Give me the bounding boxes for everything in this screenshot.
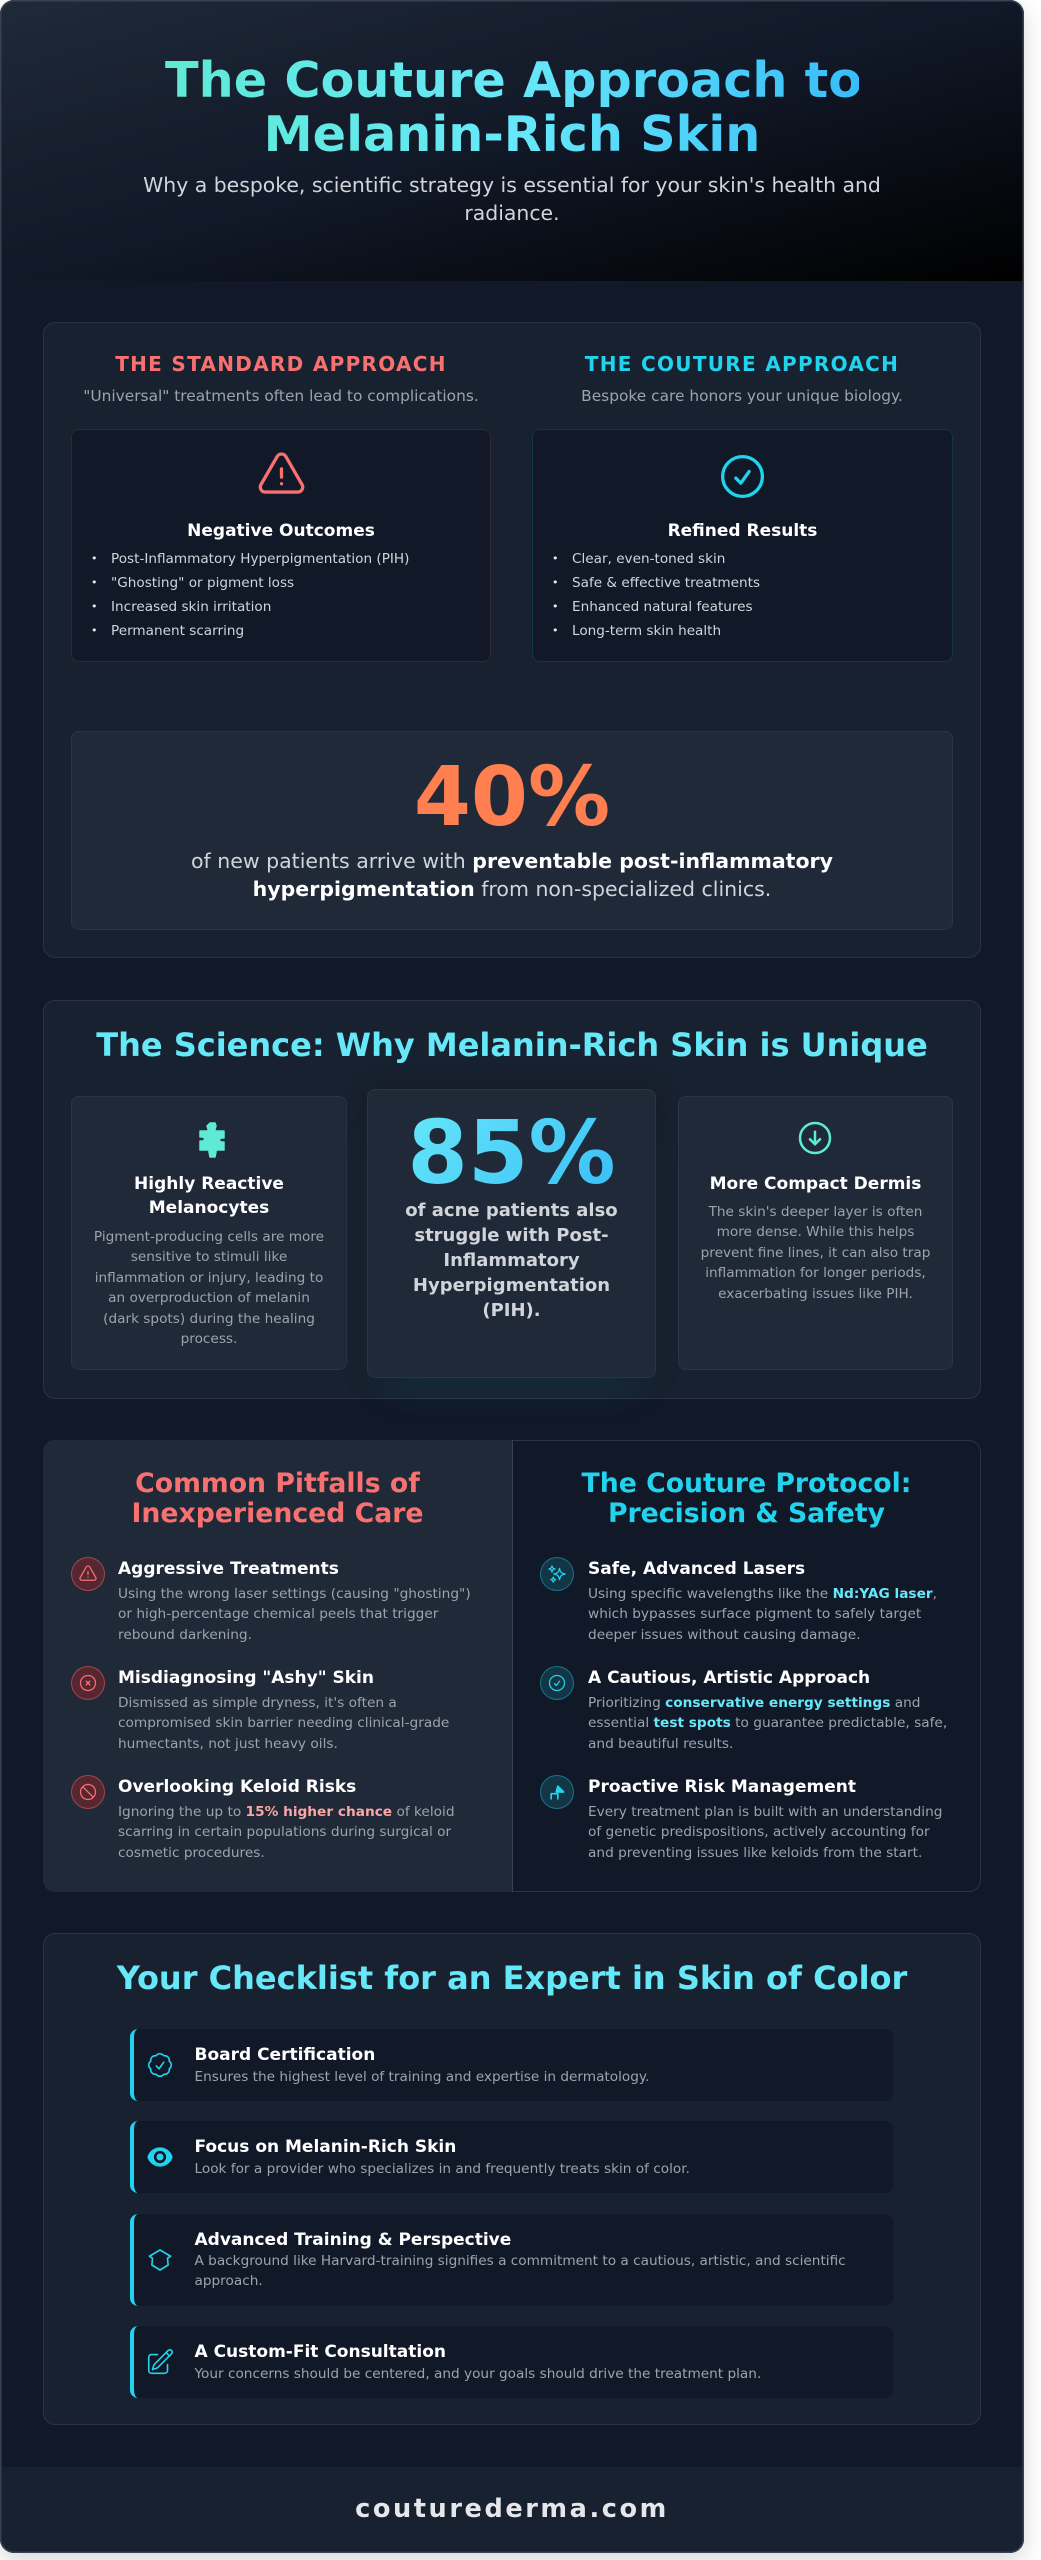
outcome list: [92, 551, 409, 639]
stat number: 85%: [407, 1102, 616, 1204]
card text: (dark spots) during the healing: [103, 1311, 315, 1327]
checklist item: board certification: [130, 2029, 893, 2101]
footer url: couturederma.com: [355, 2494, 669, 2524]
subtitle: [143, 173, 881, 225]
card text: [701, 1204, 930, 1302]
item text: [118, 1586, 471, 1643]
pitfall: overlooking keloid risks: [71, 1775, 455, 1861]
icon: x circle: [71, 1666, 105, 1700]
results list: Long-term skin health: [572, 623, 721, 639]
heading: Inexperienced Care: [131, 1498, 424, 1529]
title: The Couture Approach to: [165, 51, 862, 109]
item text: or high-percentage chemical peels that trigger: [118, 1606, 438, 1622]
checklist item: advanced training: [130, 2214, 893, 2306]
icon: arrow down circle: [798, 1122, 832, 1154]
item text: Prioritizing conservative energy settings and: [588, 1695, 920, 1711]
item title: Safe, Advanced Lasers: [588, 1559, 805, 1579]
card: compact dermis: [678, 1096, 953, 1370]
outcome list: Post-Inflammatory Hyperpigmentation (PIH): [111, 551, 409, 567]
item text: Ignoring the up to 15% higher chance of keloid: [118, 1804, 455, 1820]
column: couture protocol: [512, 1440, 981, 1892]
heading: [582, 1468, 911, 1529]
item text: humectants, not just heavy oils.: [118, 1736, 338, 1752]
icon: puzzle piece: [199, 1122, 225, 1158]
icon: check circle: [540, 1666, 574, 1700]
item text: [118, 1804, 455, 1861]
item title: Advanced Training & Perspective: [194, 2230, 511, 2250]
icon: check badge: [148, 2052, 172, 2078]
subtitle: radiance.: [464, 201, 560, 225]
icon: warning: [71, 1557, 105, 1591]
icon: no symbol: [71, 1775, 105, 1809]
item text: [194, 2253, 846, 2289]
icon: warning triangle: [258, 452, 304, 494]
subtitle: Why a bespoke, scientific strategy is essential for your skin's health and: [143, 173, 881, 197]
checklist item: melanin-rich focus: [130, 2121, 893, 2193]
icon: hexagon cap: [148, 2249, 172, 2271]
item title: Focus on Melanin-Rich Skin: [194, 2137, 456, 2157]
panel: the science: [43, 1000, 981, 1399]
stat description: of acne patients also: [405, 1200, 618, 1220]
card text: inflammation for longer periods,: [705, 1265, 926, 1281]
stat description: (PIH).: [482, 1300, 541, 1320]
item text: [588, 1804, 942, 1861]
results list: Safe & effective treatments: [572, 575, 760, 591]
results list: Clear, even-toned skin: [572, 551, 725, 567]
item text: Ensures the highest level of training and expertise in dermatology.: [194, 2069, 649, 2085]
item title: Overlooking Keloid Risks: [118, 1777, 356, 1797]
stat description: of new patients arrive with preventable post-inflammatory: [191, 849, 833, 873]
stat description: Inflammatory: [443, 1250, 580, 1270]
heading: the standard approach: THE STANDARD APPROACH: [115, 352, 447, 376]
stat description: struggle with Post-: [414, 1224, 609, 1246]
heading: The Couture Protocol:: [582, 1468, 911, 1499]
item text: Using the wrong laser settings (causing "ghosting"): [118, 1586, 471, 1602]
icon: sparkles: [540, 1557, 574, 1591]
panel: expert checklist: [43, 1933, 981, 2425]
panel: standard vs couture comparison: [43, 322, 981, 958]
item title: Misdiagnosing "Ashy" Skin: [118, 1668, 374, 1688]
subheading: couture: Bespoke care honors your unique biology.: [581, 387, 903, 405]
icon: eye: [147, 2147, 173, 2167]
card title: More Compact Dermis: [710, 1174, 921, 1194]
item text: essential test spots to guarantee predictable, safe,: [588, 1715, 947, 1731]
item text: approach.: [194, 2273, 263, 2289]
card text: Pigment-producing cells are more: [94, 1229, 324, 1245]
card: 85% stat: [367, 1089, 656, 1378]
card text: exacerbating issues like PIH.: [718, 1286, 913, 1302]
card title: Melanocytes: [149, 1198, 269, 1218]
item text: deeper issues without causing damage.: [588, 1627, 861, 1643]
results list: [554, 551, 760, 639]
card: refined results: [532, 429, 953, 662]
item text: [588, 1695, 947, 1752]
pitfall: aggressive treatments: [71, 1557, 471, 1643]
item text: of genetic predispositions, actively accounting for: [588, 1824, 930, 1840]
stat number: 40%: [414, 750, 610, 845]
item text: A background like Harvard-training signifies a commitment to a cautious, artistic, and scientific: [194, 2253, 846, 2269]
card text: The skin's deeper layer is often: [709, 1204, 922, 1220]
heading: Precision & Safety: [608, 1498, 885, 1529]
footer: [0, 2467, 1024, 2553]
outcome list: Permanent scarring: [111, 623, 244, 639]
card text: [94, 1229, 324, 1347]
icon: check circle: [721, 455, 764, 498]
item text: [118, 1695, 449, 1752]
item text: cosmetic procedures.: [118, 1845, 265, 1861]
card title: Refined Results: [668, 521, 817, 541]
item text: Using specific wavelengths like the Nd:YAG laser,: [588, 1586, 937, 1602]
item title: Aggressive Treatments: [118, 1559, 339, 1579]
panel: pitfalls vs protocol: [43, 1440, 981, 1892]
item text: and beautiful results.: [588, 1736, 733, 1752]
card: negative outcomes: [71, 429, 491, 662]
item title: Board Certification: [194, 2045, 375, 2065]
protocol: safe lasers: [540, 1557, 937, 1643]
title: [165, 54, 859, 161]
stat callout: 40%: [71, 731, 953, 930]
item text: which bypasses surface pigment to safely target: [588, 1606, 921, 1622]
item text: Dismissed as simple dryness, it's often a: [118, 1695, 397, 1711]
outcome list: Increased skin irritation: [111, 599, 271, 615]
stat description: Hyperpigmentation: [413, 1274, 610, 1296]
card text: more dense. While this helps: [717, 1224, 914, 1240]
heading: Your Checklist for an Expert in Skin of Color: [117, 1959, 907, 1997]
card title: [134, 1174, 284, 1218]
item text: [588, 1586, 937, 1643]
column: common pitfalls: [43, 1440, 512, 1892]
subheading: standard: "Universal" treatments often lead to complications.: [83, 387, 479, 405]
stat description: [405, 1200, 618, 1320]
card: reactive melanocytes: [71, 1096, 347, 1370]
outcome list: "Ghosting" or pigment loss: [111, 575, 294, 591]
card text: process.: [181, 1331, 237, 1347]
item text: Your concerns should be centered, and your goals should drive the treatment plan.: [194, 2366, 761, 2382]
card title: Highly Reactive: [134, 1174, 284, 1194]
icon: pencil square: [148, 2349, 173, 2374]
title: Melanin-Rich Skin: [264, 105, 760, 163]
heading: [131, 1468, 424, 1529]
pitfall: misdiagnosing ashy skin: [71, 1666, 449, 1752]
protocol: risk management: [540, 1775, 942, 1861]
card text: inflammation or injury, leading to: [95, 1270, 323, 1286]
item title: A Custom-Fit Consultation: [194, 2342, 446, 2362]
stat description: [191, 849, 833, 901]
item title: A Cautious, Artistic Approach: [588, 1668, 870, 1688]
card text: prevent fine lines, it can also trap: [701, 1245, 930, 1261]
protocol: cautious approach: [540, 1666, 947, 1752]
item text: Every treatment plan is built with an understanding: [588, 1804, 942, 1820]
card title: Negative Outcomes: [187, 521, 375, 541]
heading: The Science: Why Melanin-Rich Skin is Unique: [96, 1026, 928, 1064]
item text: scarring in certain populations during surgical or: [118, 1824, 451, 1840]
icon: shield arrow: [540, 1775, 574, 1809]
card text: sensitive to stimuli like: [131, 1249, 287, 1265]
item text: compromised skin barrier needing clinical-grade: [118, 1715, 449, 1731]
heading: Common Pitfalls of: [135, 1468, 420, 1499]
item text: rebound darkening.: [118, 1627, 252, 1643]
item text: Look for a provider who specializes in and frequently treats skin of color.: [194, 2161, 690, 2177]
stat description: hyperpigmentation from non-specialized clinics.: [253, 877, 771, 901]
header: [0, 0, 1024, 281]
heading: the couture approach: THE COUTURE APPROACH: [585, 352, 899, 376]
results list: Enhanced natural features: [572, 599, 753, 615]
item title: Proactive Risk Management: [588, 1777, 856, 1797]
card text: an overproduction of melanin: [108, 1290, 310, 1306]
checklist item: custom-fit consultation: [130, 2326, 893, 2398]
item text: and preventing issues like keloids from the start.: [588, 1845, 922, 1861]
